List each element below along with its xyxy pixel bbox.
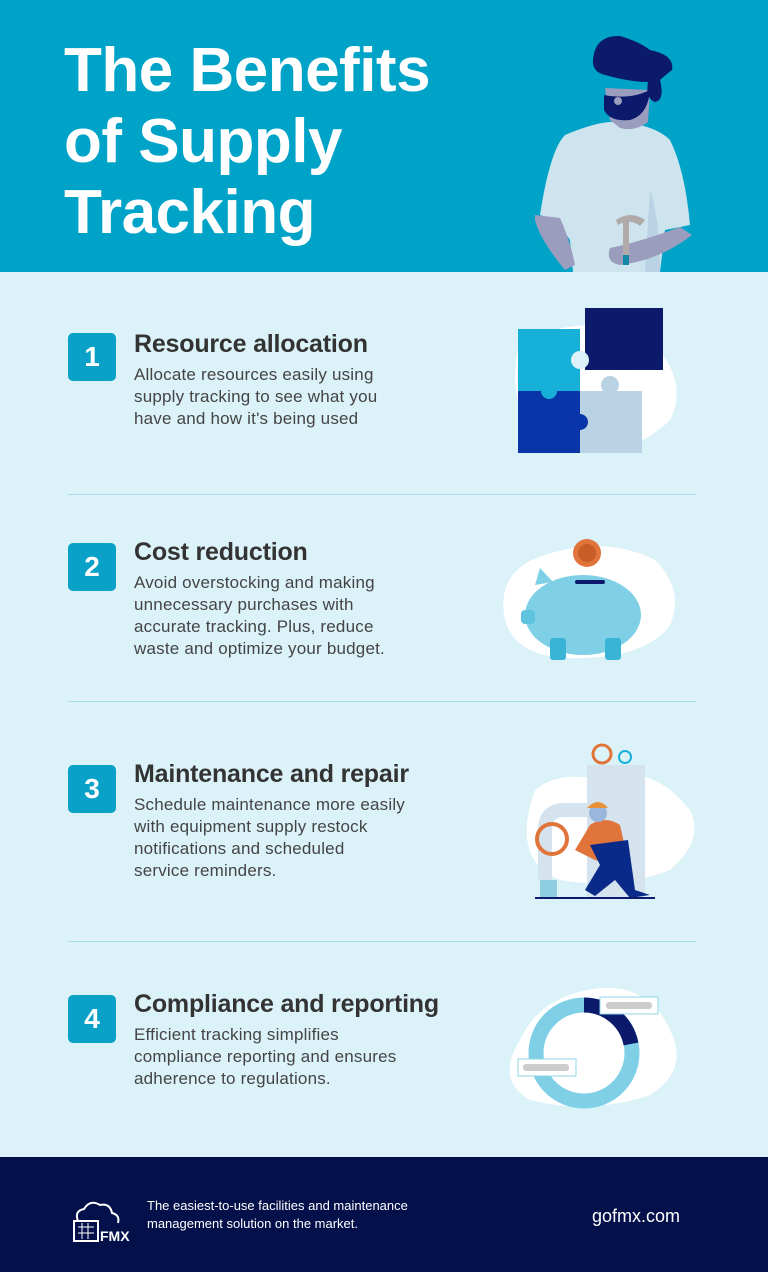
footer [0, 1157, 768, 1272]
logo icon [73, 1202, 130, 1244]
icon: puzzle [515, 308, 677, 453]
icon: worker with valve [526, 744, 694, 899]
text 3: service reminders. [134, 861, 276, 880]
item 3 [68, 760, 409, 880]
tagline: The easiest-to-use facilities and maintenance [147, 1198, 408, 1213]
title [64, 36, 430, 247]
text 1: have and how it's being used [134, 409, 358, 428]
number badge 4 [68, 995, 116, 1043]
text 3: Schedule maintenance more easily [134, 795, 405, 814]
number badge 3: 3 [84, 773, 100, 804]
text 2: accurate tracking. Plus, reduce [134, 617, 374, 636]
header panel [0, 0, 768, 272]
tagline [147, 1198, 408, 1231]
number badge 3 [68, 765, 116, 813]
heading 1: Resource allocation [134, 330, 368, 358]
title: Tracking [64, 178, 315, 247]
text 4: compliance reporting and ensures [134, 1047, 396, 1066]
illustration: man with hammer [535, 36, 692, 272]
text 4 [134, 1025, 396, 1088]
tagline: management solution on the market. [147, 1216, 358, 1231]
text 4: Efficient tracking simplifies [134, 1025, 339, 1044]
text 1 [134, 365, 377, 428]
website: gofmx.com [592, 1206, 680, 1226]
item 1 [68, 330, 377, 428]
text 2: unnecessary purchases with [134, 595, 354, 614]
title: of Supply [64, 107, 342, 176]
number badge 4: 4 [84, 1003, 100, 1034]
heading 4: Compliance and reporting [134, 990, 439, 1018]
title: The Benefits [64, 36, 430, 105]
icon: donut chart [510, 988, 677, 1108]
item 2 [68, 538, 385, 658]
text 2 [134, 573, 385, 658]
number badge 2 [68, 543, 116, 591]
text 4: adherence to regulations. [134, 1069, 331, 1088]
heading 2: Cost reduction [134, 538, 308, 566]
logo icon: FMX [100, 1228, 130, 1244]
number badge 1: 1 [84, 341, 100, 372]
text 3: with equipment supply restock [134, 817, 368, 836]
number badge 1 [68, 333, 116, 381]
text 3: notifications and scheduled [134, 839, 344, 858]
text 2: waste and optimize your budget. [134, 639, 385, 658]
number badge 2: 2 [84, 551, 100, 582]
item 4 [68, 990, 439, 1088]
text 1: supply tracking to see what you [134, 387, 377, 406]
text 2: Avoid overstocking and making [134, 573, 375, 592]
text 1: Allocate resources easily using [134, 365, 374, 384]
icon: piggy bank [503, 539, 675, 660]
heading 3: Maintenance and repair [134, 760, 409, 788]
text 3 [134, 795, 405, 880]
